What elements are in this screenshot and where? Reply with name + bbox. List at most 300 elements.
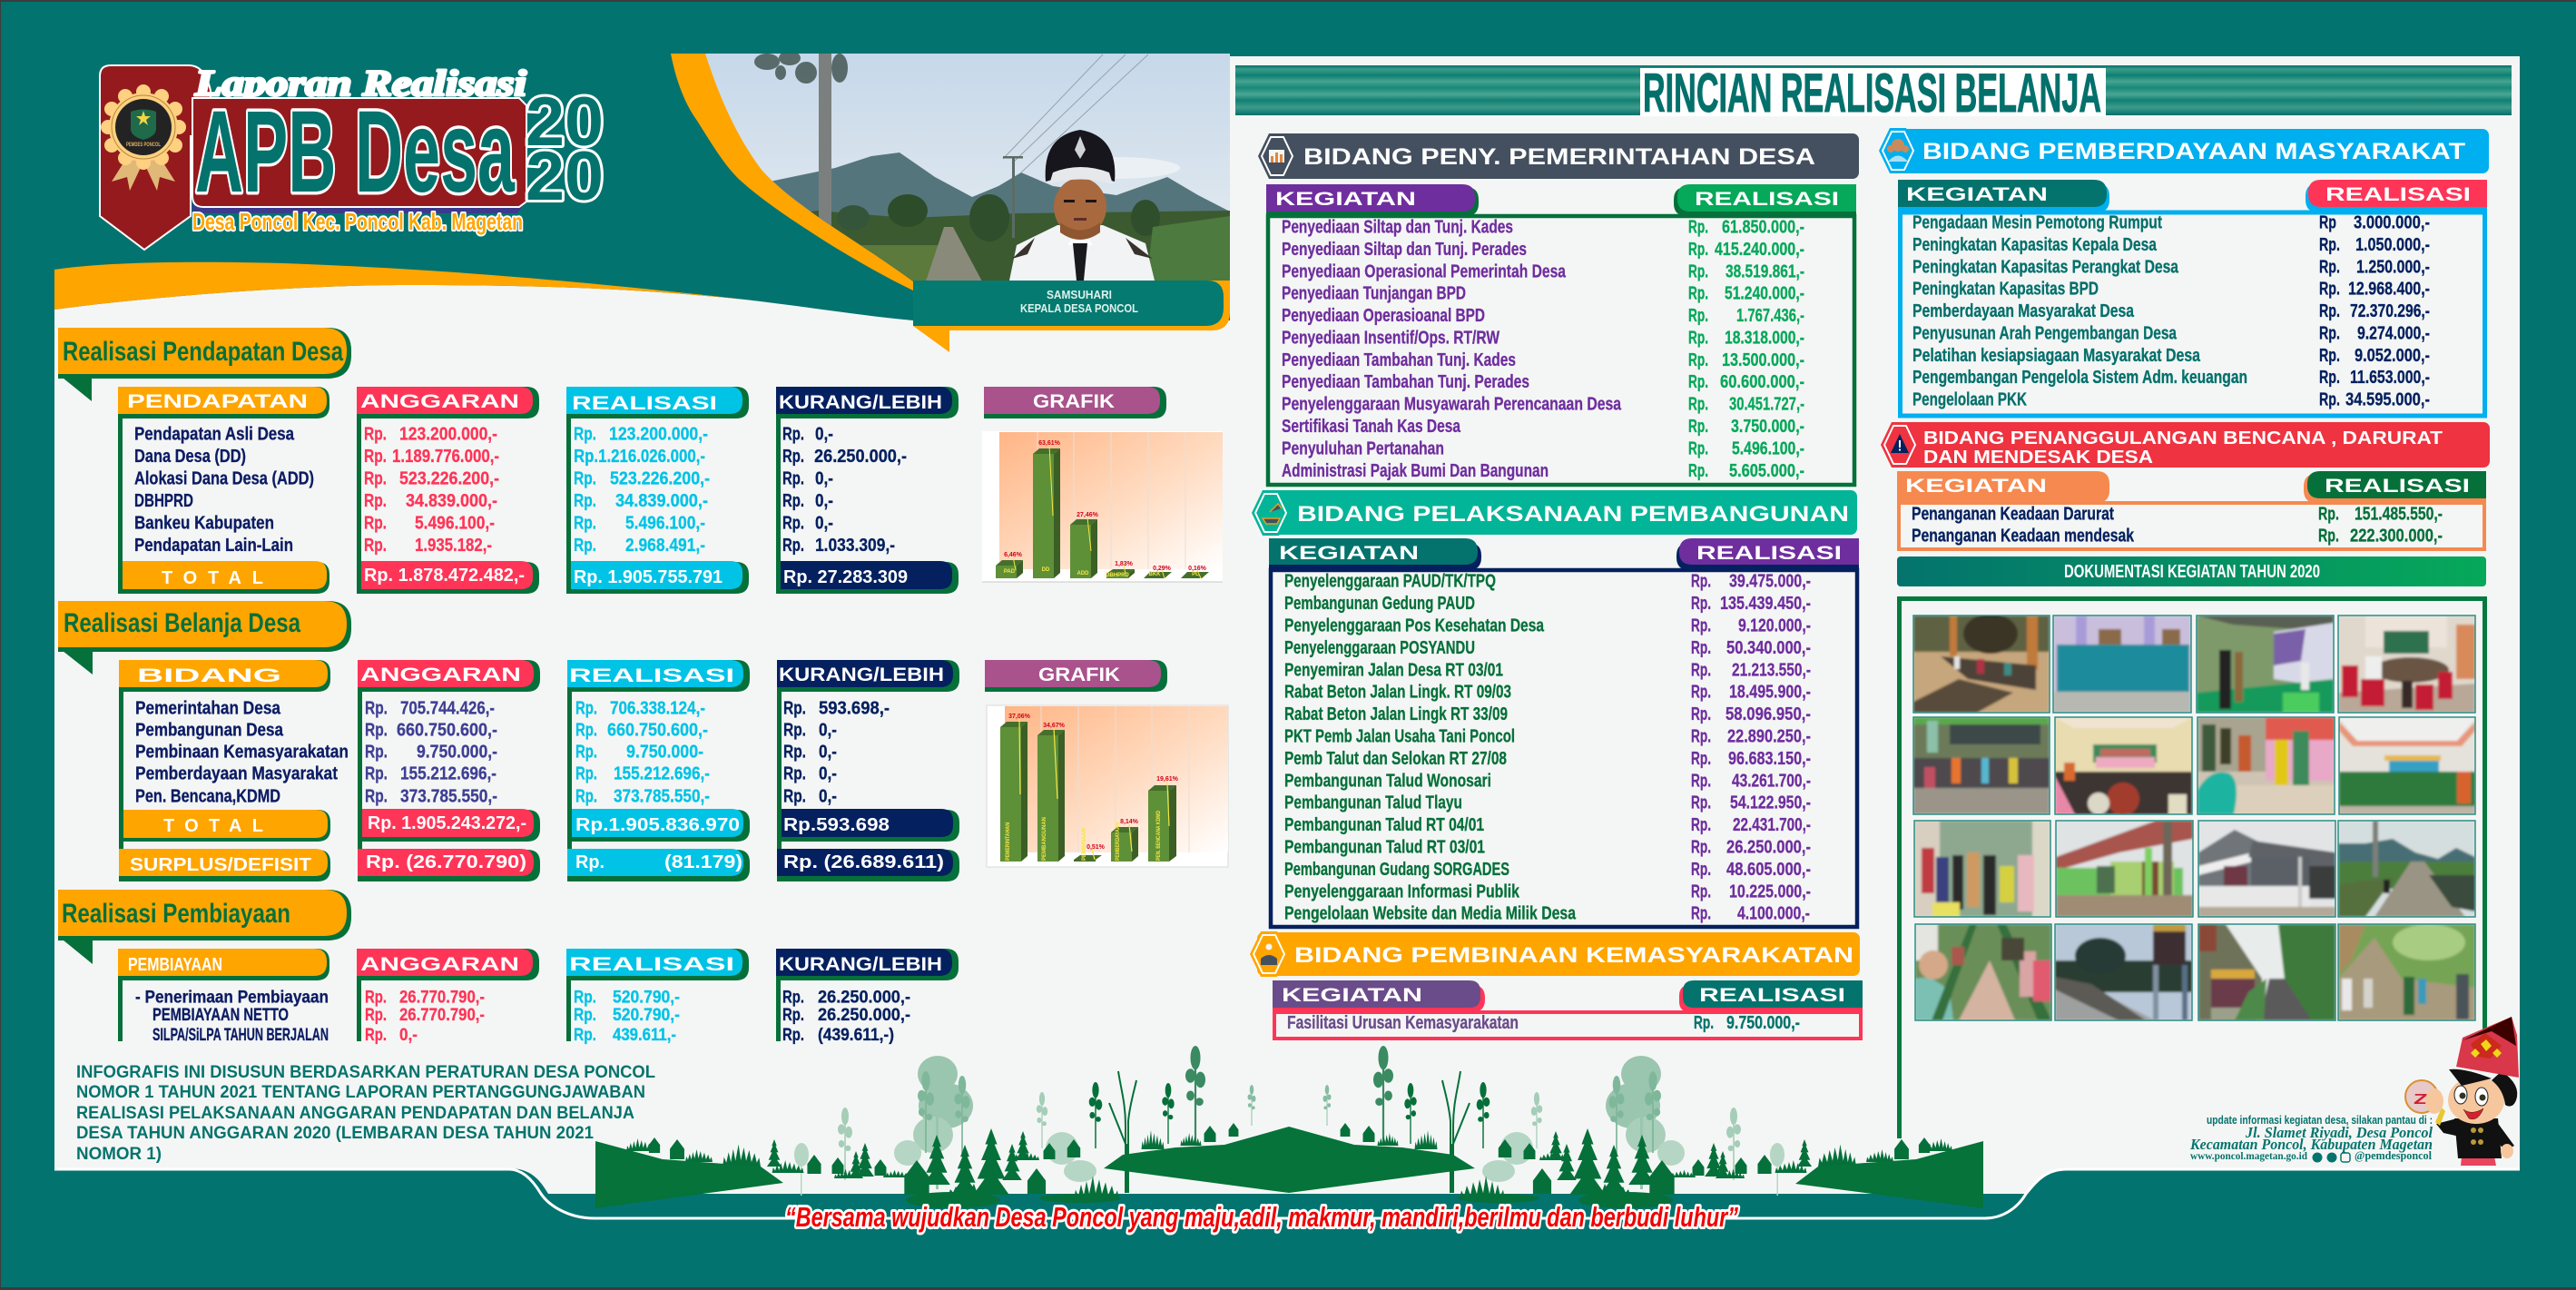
kurang lebih values: 0,- [819, 764, 837, 784]
list of amounts: Rp. [1688, 283, 1708, 303]
realisasi values: 439.611,- [613, 1026, 676, 1045]
realisasi values: Rp. [574, 536, 596, 556]
list of activities: Penyediaan Tunjangan BPD [1282, 283, 1466, 303]
chart: belanja: PEMERINTAHAN [1006, 822, 1011, 861]
panel: bidang pembinaan kemasyarakatan [1250, 931, 1863, 1039]
chart: pendapatan: 63,61% [1038, 440, 1061, 447]
realisasi values: Rp. [574, 514, 596, 534]
list of amounts: Rp. [1691, 771, 1711, 791]
section banner [1879, 128, 2489, 173]
anggaran values: 34.839.000,- [406, 491, 497, 511]
kurang lebih values: 26.250.000,- [814, 447, 907, 467]
photo: village head in landscape [705, 54, 1230, 281]
column headers: KURANG/LEBIH [779, 665, 944, 685]
table outline [1271, 570, 1857, 927]
anggaran values: Rp. [364, 536, 387, 556]
chart: pendapatan: 0,29% [1153, 566, 1172, 572]
anggaran values: Rp. [365, 721, 388, 741]
tab kegiatan: KEGIATAN [1282, 985, 1422, 1006]
list of amounts: 39.475.000,- [1729, 572, 1811, 592]
anggaran values: Rp. [365, 786, 388, 806]
column headers [118, 949, 959, 980]
labels: Pembinaan Kemasyarakatan [135, 743, 349, 763]
chart: belanja: 34,67% [1043, 723, 1066, 729]
anggaran values: 705.744.426,- [400, 699, 495, 719]
slogan: “Bersama wujudkan Desa Poncol yang maju,adil, makmur, mandiri,berilmu dan berbudi luhur” [785, 1201, 1738, 1233]
list of amounts: Rp. [1688, 439, 1708, 459]
legal note paragraph: REALISASI PELAKSANAAN ANGGARAN PENDAPATAN DAN BELANJA [76, 1104, 634, 1123]
list of amounts: 50.340.000,- [1726, 638, 1811, 658]
list of amounts: Rp. [1688, 372, 1708, 392]
list of amounts: Rp. [1691, 660, 1711, 680]
list of amounts: 13.500.000,- [1722, 350, 1804, 370]
anggaran values: 5.496.100,- [415, 514, 495, 534]
list of amounts: Rp. [1691, 837, 1711, 857]
orange photo arc [671, 54, 913, 290]
footer contact text: Kecamatan Poncol, Kabupaten Magetan [2189, 1136, 2433, 1153]
legal note paragraph: DESA TAHUN ANGGARAN 2020 (LEMBARAN DESA TAHUN 2021 [76, 1124, 594, 1143]
section banner [1881, 422, 2490, 468]
anggaran values: 1.189.776.000,- [392, 447, 499, 467]
column headers: PEMBIAYAAN [128, 955, 222, 975]
heading: dokumentasi kegiatan [1897, 556, 2486, 586]
list of activities: Penyelenggaraan Pos Kesehatan Desa [1284, 615, 1545, 635]
photo 11 [2198, 822, 2335, 917]
landscape silhouette [595, 1046, 1983, 1208]
mascot: Z [2414, 1092, 2428, 1108]
list of amounts: Rp. [1691, 704, 1711, 724]
list of activities: Administrasi Pajak Bumi Dan Bangunan [1282, 461, 1549, 481]
tab realisasi [1679, 980, 1863, 1012]
realisasi values [574, 425, 710, 556]
chart: belanja: PEMBINAAN [1082, 828, 1087, 861]
column rules [118, 980, 781, 1041]
title: year 2020 [526, 84, 604, 215]
list of amounts: Rp. [2319, 323, 2340, 343]
kurang lebih values: 0,- [819, 786, 837, 806]
kurang lebih values: (439.611,-) [818, 1026, 894, 1045]
list of activities: Rabat Beton Jalan Lingk RT 33/09 [1284, 704, 1508, 724]
activity rows: Penanganan Keadaan mendesak [1912, 527, 2135, 547]
activity rows: 222.300.000,- [2350, 527, 2443, 547]
list of amounts: 135.439.450,- [1720, 594, 1811, 614]
list of amounts: 60.600.000,- [1720, 372, 1804, 392]
list of activities: Pemberdayaan Masyarakat Desa [1912, 301, 2135, 321]
photo 3 [2197, 615, 2333, 712]
list of amounts: 1.250.000,- [2356, 258, 2430, 278]
chart: belanja: 8,14% [1120, 819, 1139, 825]
anggaran values [365, 699, 497, 806]
list of amounts: 54.122.950,- [1730, 793, 1811, 813]
kurang lebih values: 0,- [815, 514, 833, 534]
list of amounts: Rp [2319, 212, 2336, 232]
surplus defisit row: SURPLUS/DEFISIT [130, 855, 311, 875]
realisasi values: 155.212.696,- [614, 764, 710, 784]
list of amounts: Rp. [2319, 258, 2340, 278]
realisasi values: 660.750.600,- [607, 721, 708, 741]
anggaran values: Rp. [364, 468, 387, 488]
labels: SILPA/SiLPA TAHUN BERJALAN [152, 1026, 329, 1045]
realisasi values: Rp. [574, 425, 596, 445]
photo 14 [2055, 924, 2191, 1020]
labels: Dana Desa (DD) [134, 447, 246, 467]
tab realisasi: REALISASI [2325, 476, 2470, 497]
realisasi values: Rp. [574, 1006, 596, 1025]
labels: Pembangunan Desa [135, 721, 284, 741]
list of amounts: 11.653.000,- [2350, 368, 2430, 388]
tab realisasi [1674, 184, 1856, 216]
labels: Pendapatan Asli Desa [134, 425, 295, 445]
realisasi values: 520.790,- [613, 988, 680, 1008]
list of amounts: 38.519.861,- [1726, 261, 1804, 281]
column headers: ANGGARAN [360, 954, 519, 975]
photo 6 [2055, 717, 2191, 813]
chart: pendapatan: 0,16% [1188, 566, 1207, 572]
list of activities: Penyediaan Tambahan Tunj. Perades [1282, 372, 1529, 392]
list of activities: Penyediaan Operasional Pemerintah Desa [1282, 261, 1567, 281]
list of activities: Pembangunan Gudang SORGADES [1284, 860, 1509, 880]
anggaran values: 155.212.696,- [400, 764, 497, 784]
kurang lebih values: Rp. [782, 468, 804, 488]
list of amounts: Rp. [2319, 301, 2340, 321]
title: year 2020: 20 [526, 84, 604, 161]
list of amounts: Rp. [1688, 394, 1708, 414]
anggaran values [364, 425, 499, 556]
kurang lebih values: 0,- [819, 721, 837, 741]
column rules [118, 419, 781, 591]
list of amounts: Rp. [1691, 594, 1711, 614]
surplus defisit row: (81.179) [664, 852, 742, 872]
list of amounts: Rp. [1691, 749, 1711, 769]
activity row [1287, 1013, 1800, 1033]
anggaran values: 26.770.790,- [399, 988, 485, 1008]
anggaran values: 373.785.550,- [400, 786, 497, 806]
column headers: GRAFIK [1033, 391, 1115, 412]
footer contact text: www.poncol.magetan.go.id [2190, 1149, 2307, 1162]
kurang lebih values [783, 699, 890, 806]
list of amounts: 22.431.700,- [1733, 815, 1811, 835]
photo gallery [1913, 614, 2475, 1021]
photo 15 [2198, 924, 2335, 1020]
realisasi values: 706.338.124,- [610, 699, 705, 719]
kurang lebih values: Rp. [782, 1026, 804, 1045]
subtitle: village: Desa Poncol Kec. Poncol Kab. Magetan [192, 208, 523, 235]
surplus defisit row: Rp. (26.770.790) [366, 852, 526, 872]
list of activities: Pembangunan Talud Wonosari [1284, 771, 1491, 791]
legal note paragraph [76, 1063, 655, 1164]
list of amounts: 43.261.700,- [1732, 771, 1811, 791]
column headers: GRAFIK [1038, 665, 1120, 685]
list of amounts: Rp. [2319, 280, 2340, 300]
kurang lebih values: 0,- [815, 491, 833, 511]
anggaran values: Rp. [364, 425, 387, 445]
kurang lebih values: Rp. [782, 536, 804, 556]
realisasi values: Rp. [575, 764, 597, 784]
kurang lebih values: Rp. [782, 1006, 804, 1025]
kurang lebih values [782, 425, 907, 556]
column headers: REALISASI [569, 665, 734, 686]
surplus defisit row [119, 849, 959, 881]
photo 12 [2338, 821, 2474, 917]
activity rows: Rp. [2318, 505, 2339, 525]
photo 8 [2340, 718, 2474, 813]
photo caption box: SAMSUHARI [1047, 288, 1112, 301]
chart: belanja: PEN. BENCANA KDMD [1156, 810, 1162, 861]
panel: bidang penanggulangan bencana [1881, 422, 2490, 549]
kurang lebih values: Rp. [782, 514, 804, 534]
totals row [118, 561, 959, 594]
list of amounts: 58.096.950,- [1726, 704, 1811, 724]
kurang lebih values: Rp. [783, 721, 806, 741]
chart: belanja [987, 705, 1228, 867]
labels: Alokasi Dana Desa (ADD) [134, 468, 314, 488]
column headers: KURANG/LEBIH [779, 392, 942, 413]
list of activities: Pembangunan Talud RT 04/01 [1284, 815, 1484, 835]
anggaran values: Rp. [364, 491, 387, 511]
section banner: BIDANG PELAKSANAAN PEMBANGUNAN [1297, 502, 1849, 527]
totals row: Rp. 27.283.309 [783, 567, 908, 587]
kurang lebih values: Rp. [782, 447, 804, 467]
tab kegiatan: KEGIATAN [1906, 184, 2048, 205]
realisasi values: 373.785.550,- [614, 786, 710, 806]
anggaran values: 0,- [399, 1026, 418, 1045]
list of amounts: Rp. [1691, 572, 1711, 592]
list of activities: Pelatihan kesiapsiagaan Masyarakat Desa [1912, 346, 2201, 366]
list of amounts: Rp. [2319, 368, 2340, 388]
panel: realisasi pembiayaan [58, 890, 959, 1045]
list of amounts: Rp. [2319, 346, 2340, 366]
photo 7 [2198, 717, 2335, 813]
heading: realisasi belanja [58, 601, 351, 675]
list of amounts: Rp. [1688, 218, 1708, 238]
panel: realisasi pendapatan desa [58, 328, 1223, 594]
photo 5 [1913, 717, 2050, 813]
totals row: Rp. 1.905.243.272,- [368, 813, 526, 833]
column headers: KURANG/LEBIH [779, 954, 942, 975]
list of activities: Penyediaan Siltap dan Tunj. Kades [1282, 218, 1513, 238]
footer contact text: Jl. Slamet Riyadi, Desa Poncol [2245, 1124, 2433, 1141]
tab kegiatan [1273, 980, 1485, 1012]
list of amounts: 26.250.000,- [1726, 837, 1811, 857]
footer contact text: update informasi kegiatan desa, silakan pantau di : [2207, 1113, 2433, 1127]
realisasi values: Rp. [574, 988, 596, 1008]
photo 16 [2338, 924, 2474, 1020]
panel: bidang pelaksanaan pembangunan [1252, 490, 1859, 927]
list of amounts: 9.052.000,- [2355, 346, 2430, 366]
list of amounts: Rp. [1691, 793, 1711, 813]
list of activities: Penyemiran Jalan Desa RT 03/01 [1284, 660, 1503, 680]
realisasi values: 123.200.000,- [609, 425, 708, 445]
list of activities: Pengadaan Mesin Pemotong Rumput [1912, 212, 2162, 232]
photo 9 [1915, 821, 2050, 917]
tab realisasi: REALISASI [1696, 543, 1842, 564]
list of activities [1282, 218, 1622, 481]
list of activities: Penyuluhan Pertanahan [1282, 439, 1444, 459]
tab realisasi: REALISASI [1695, 189, 1839, 210]
realisasi values: 5.496.100,- [625, 514, 705, 534]
kurang lebih values: Rp. [783, 699, 806, 719]
list of amounts: Rp. [1691, 638, 1711, 658]
kurang lebih values: 26.250.000,- [818, 988, 910, 1008]
list of amounts: 21.213.550,- [1732, 660, 1811, 680]
tab realisasi [2306, 180, 2487, 212]
realisasi values: 523.226.200,- [610, 468, 710, 488]
list of amounts: 72.370.296,- [2350, 301, 2430, 321]
anggaran values: 660.750.600,- [397, 721, 497, 741]
chart: belanja: 19,61% [1156, 776, 1179, 783]
title: year 2020: 20 [526, 138, 604, 215]
realisasi values: 34.839.000,- [615, 491, 708, 511]
chart: pendapatan: 27,46% [1077, 512, 1099, 518]
heading: realisasi belanja: Realisasi Belanja Desa [64, 608, 300, 638]
kurang lebih values: 0,- [819, 743, 837, 763]
chart: pendapatan: 6,46% [1004, 552, 1023, 558]
column headers [118, 387, 1166, 419]
list of amounts: 10.225.000,- [1729, 881, 1811, 901]
table outline [1268, 216, 1854, 485]
list of activities: Penyelenggaraan Informasi Publik [1284, 881, 1520, 901]
anggaran values: Rp. [365, 1006, 387, 1025]
realisasi values: Rp. [574, 491, 596, 511]
photo 13 [1915, 924, 2051, 1020]
list of amounts: 30.451.727,- [1729, 394, 1804, 414]
realisasi values: 520.790,- [613, 1006, 680, 1025]
realisasi values: Rp. [575, 743, 597, 763]
anggaran values: Rp. [365, 743, 388, 763]
list of amounts: Rp. [1688, 461, 1708, 481]
documentation frame [1899, 599, 2485, 1138]
anggaran values: 9.750.000,- [417, 743, 497, 763]
list of activities: Penyelenggaraan PAUD/TK/TPQ [1284, 572, 1496, 592]
chart: pendapatan: PAD [1004, 569, 1016, 575]
anggaran values: Rp. [365, 699, 388, 719]
labels: Pen. Bencana,KDMD [135, 786, 280, 806]
list of activities [1912, 212, 2247, 410]
list of amounts: Rp. [1691, 860, 1711, 880]
list of amounts: 18.495.900,- [1729, 683, 1811, 703]
labels: Bankeu Kabupaten [134, 514, 274, 534]
tab kegiatan [1898, 180, 2109, 212]
list of amounts: Rp. [2319, 235, 2340, 255]
totals row: Rp. 1.878.472.482,- [364, 566, 525, 586]
title band: rincian realisasi belanja: RINCIAN REALISASI BELANJA [1643, 63, 2101, 123]
column headers: PENDAPATAN [127, 391, 308, 412]
list of amounts: 12.968.400,- [2348, 280, 2430, 300]
right hill [1795, 1141, 1983, 1208]
anggaran values: Rp. [365, 1026, 387, 1045]
kurang lebih values: Rp. [782, 491, 804, 511]
table outline [1274, 1012, 1861, 1039]
list of activities: Sertifikasi Tanah Kas Desa [1282, 417, 1461, 437]
list of activities: Penyediaan Operasioanal BPD [1282, 306, 1485, 326]
title: APB Desa banner: APB Desa [195, 87, 515, 217]
list of amounts: 51.240.000,- [1725, 283, 1804, 303]
realisasi values: Rp. [574, 1026, 596, 1045]
kurang lebih values: 0,- [815, 468, 833, 488]
panel: bidang pemberdayaan masyarakat [1879, 128, 2489, 416]
list of amounts: Rp. [1688, 261, 1708, 281]
realisasi values: Rp. [574, 468, 596, 488]
totals row: Rp.593.698 [783, 815, 890, 835]
list of activities: Penyediaan Tambahan Tunj. Kades [1282, 350, 1516, 370]
anggaran values: Rp. [364, 514, 387, 534]
table outline [1901, 212, 2485, 416]
legal note paragraph: INFOGRAFIS INI DISUSUN BERDASARKAN PERATURAN DESA PONCOL [76, 1063, 655, 1082]
list of amounts: Rp. [1688, 350, 1708, 370]
tab kegiatan [1266, 184, 1479, 216]
footer contact text [2189, 1113, 2433, 1162]
totals row: Rp. 1.905.755.791 [574, 567, 723, 587]
list of amounts: Rp. [1691, 881, 1711, 901]
labels [135, 988, 329, 1045]
labels: Pemberdayaan Masyarakat [135, 764, 338, 784]
list of activities: Peningkatan Kapasitas BPD [1912, 280, 2099, 300]
kurang lebih values: Rp. [782, 425, 804, 445]
left hill [595, 1141, 783, 1208]
tab realisasi: REALISASI [1699, 985, 1845, 1006]
surplus defisit row: Rp. (26.689.611) [783, 852, 944, 872]
labels: Pemerintahan Desa [135, 699, 281, 719]
realisasi values: Rp. [575, 721, 597, 741]
list of amounts: Rp. [2319, 390, 2340, 410]
table outline [1899, 503, 2484, 549]
column headers [119, 660, 1167, 692]
logo: ribbon with medal: PEMDES PONCOL [126, 143, 161, 148]
list of amounts: 3.750.000,- [1731, 417, 1804, 437]
mascot [2405, 1017, 2519, 1166]
list of activities: Peningkatan Kapasitas Kepala Desa [1912, 235, 2158, 255]
anggaran values [365, 988, 485, 1045]
chart: belanja: 37,06% [1008, 714, 1031, 720]
list of amounts: Rp. [1691, 726, 1711, 746]
kurang lebih values: 26.250.000,- [818, 1006, 910, 1025]
totals row: TOTAL [162, 568, 263, 588]
chart: pendapatan: BKK [1149, 572, 1161, 577]
activity rows: Penanganan Keadaan Darurat [1912, 505, 2114, 525]
kurang lebih values: Rp. [783, 764, 806, 784]
column headers: ANGGARAN [360, 391, 519, 412]
list of amounts: 1.767.436,- [1736, 306, 1804, 326]
list of amounts: Rp. [1691, 815, 1711, 835]
anggaran values: 523.226.200,- [399, 468, 499, 488]
realisasi values: Rp. [575, 786, 597, 806]
heading: realisasi pembiayaan [58, 890, 351, 964]
tab kegiatan: KEGIATAN [1275, 189, 1416, 210]
column headers: BIDANG [137, 665, 281, 686]
list of amounts: Rp. [1688, 306, 1708, 326]
kurang lebih values: 0,- [815, 425, 833, 445]
column rules [119, 692, 782, 864]
section banner: BIDANG PENANGGULANGAN BENCANA , DARURAT [1923, 428, 2443, 448]
list of activities: Pengelolaan Website dan Media Milik Desa [1284, 904, 1577, 924]
kurang lebih values [782, 988, 910, 1045]
list of activities: Pembangunan Talud Tlayu [1284, 793, 1462, 813]
kurang lebih values: Rp. [782, 988, 804, 1008]
list of amounts: Rp. [1691, 615, 1711, 635]
list of amounts [1691, 572, 1811, 924]
list of amounts: 22.890.250,- [1727, 726, 1811, 746]
activity row: 9.750.000,- [1726, 1013, 1800, 1033]
title band: rincian realisasi belanja [1235, 63, 2512, 123]
anggaran values: Rp. [365, 988, 387, 1008]
activity rows: Rp. [2318, 527, 2339, 547]
chart: belanja: 0,51% [1086, 844, 1106, 851]
section banner [1252, 490, 1857, 536]
surplus defisit row: Rp. [575, 852, 605, 872]
list of amounts: Rp. [1688, 417, 1708, 437]
orange swoosh [54, 262, 745, 310]
list of activities: Penyediaan Insentif/Ops. RT/RW [1282, 329, 1499, 349]
